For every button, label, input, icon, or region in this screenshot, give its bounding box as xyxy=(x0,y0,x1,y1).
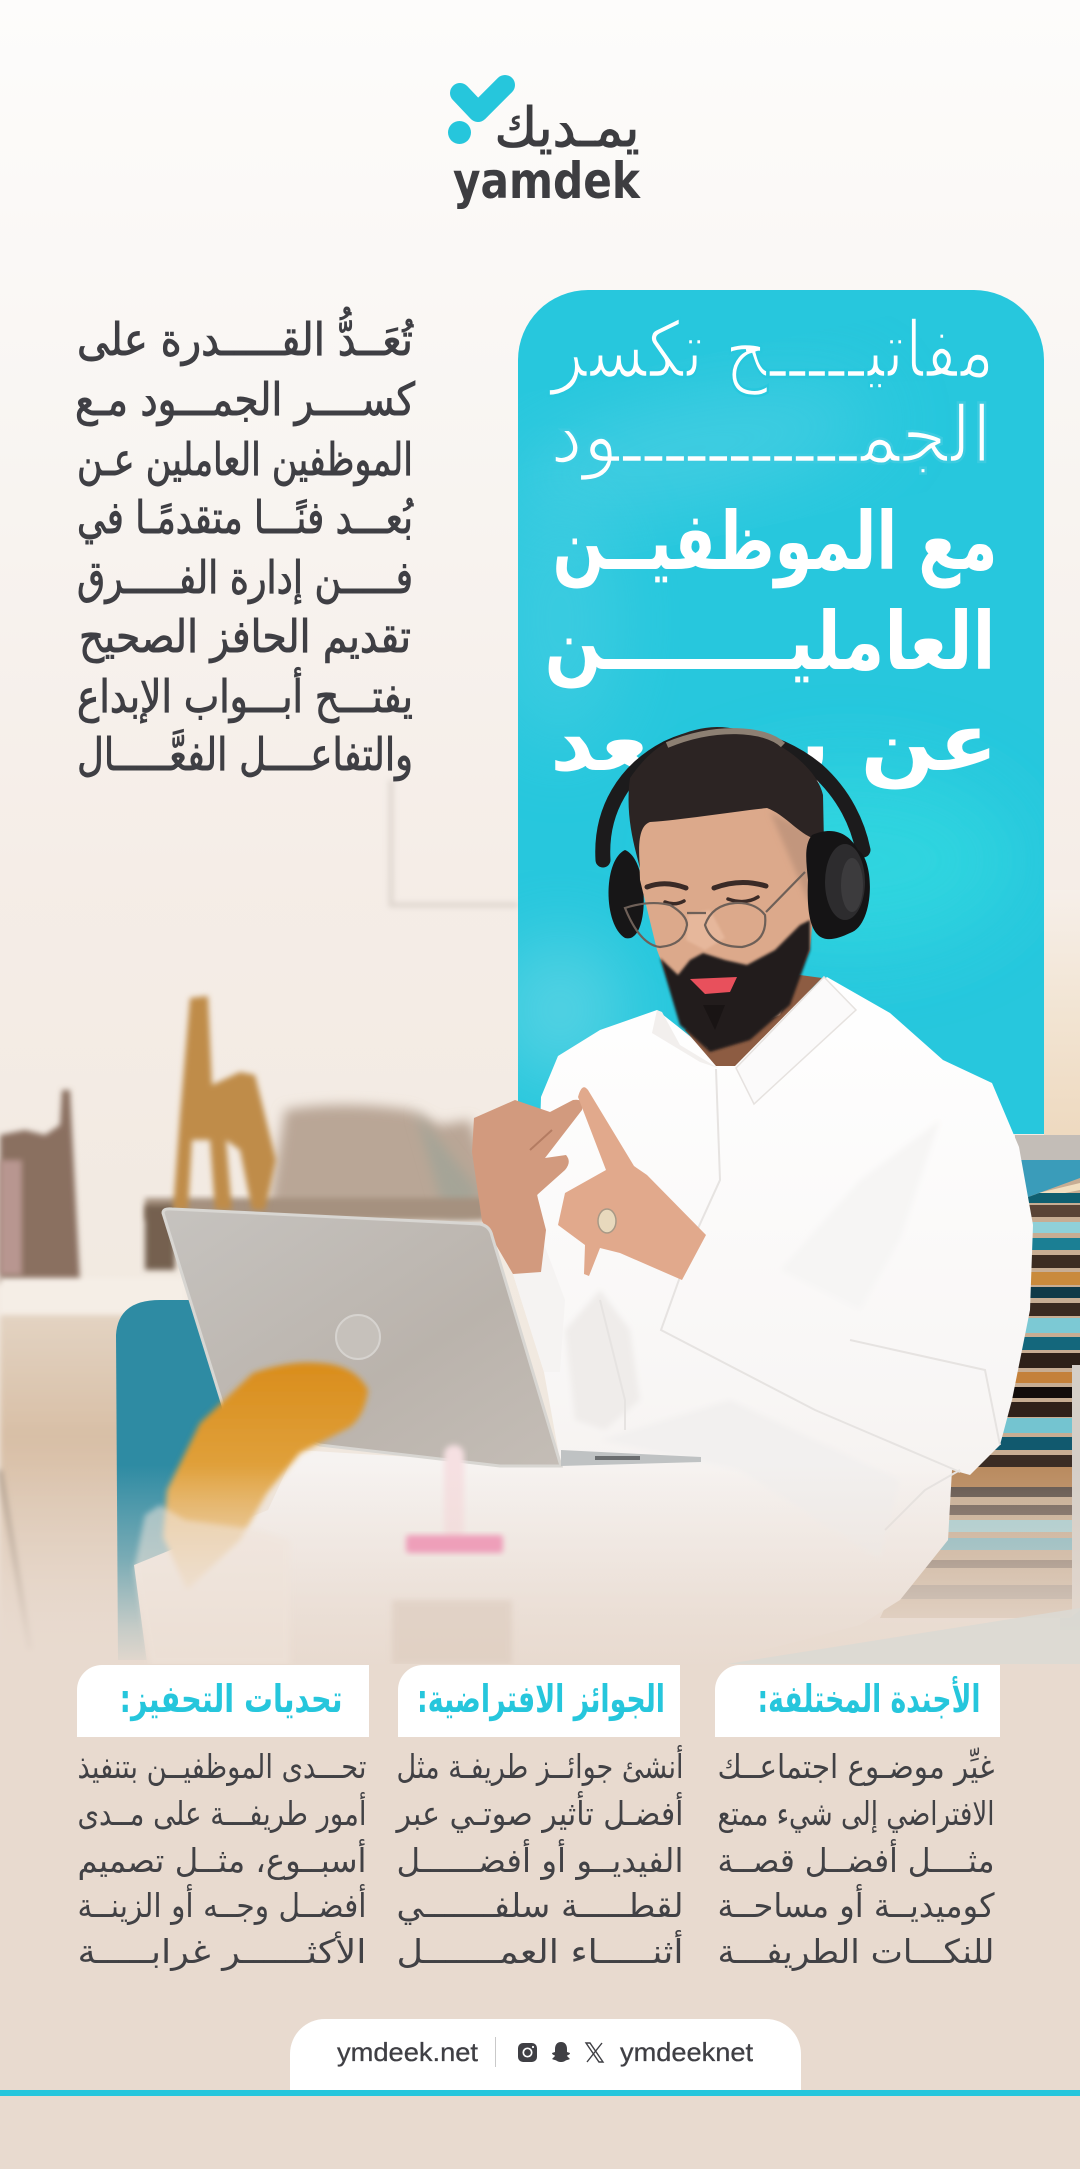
right ear cup xyxy=(806,831,870,939)
laptop xyxy=(163,1209,701,1466)
body text: الفيديــو أو أفضــــــل xyxy=(396,1839,684,1880)
soul patch xyxy=(703,1005,725,1030)
body text: غيِّر موضـوع اجتماعــك xyxy=(718,1747,994,1786)
intro paragraph: فـــــن إدارة الفـــــرق xyxy=(77,551,413,604)
intro paragraph: بُعـــد فنًـــا متقدمًـا في xyxy=(77,491,414,544)
icon: snapchat xyxy=(552,2042,570,2062)
hair xyxy=(629,727,824,868)
title: الجمـــــــــــود xyxy=(550,391,992,482)
heading card: الجوائز الافتراضية: xyxy=(417,1677,665,1721)
face xyxy=(638,800,818,1048)
body text: الأكثــــــر غرابـــــة xyxy=(78,1931,366,1971)
icon: X xyxy=(586,2043,603,2062)
heading card: تحديات التحفيز: xyxy=(120,1677,342,1721)
intro paragraph: كســــر الجمـــود مـع xyxy=(75,373,415,426)
intro paragraph: والتفاعــــل الفعَّـــــال xyxy=(77,728,413,782)
bottom fade xyxy=(0,1465,1080,1670)
body text: أسبــوع، مثــل تصميم xyxy=(78,1839,366,1880)
footer bar: ymdeeknet xyxy=(620,2037,754,2067)
panel: virtual awards column xyxy=(395,1665,684,1971)
body text: مثــــل أفضــل قصــة xyxy=(718,1839,994,1880)
heading card: الأجندة المختلفة: xyxy=(758,1675,980,1721)
panel: teal title card xyxy=(495,290,1044,1134)
panel: agenda column xyxy=(715,1665,1000,1971)
body text xyxy=(395,1745,684,1971)
glasses xyxy=(625,872,805,947)
body text xyxy=(78,1747,366,1971)
heading card xyxy=(715,1665,1000,1737)
title: عن بـــــعد xyxy=(550,696,998,790)
bottom band xyxy=(0,1664,1080,2169)
hand left xyxy=(472,1100,583,1274)
footer bar: ymdeek.net xyxy=(337,2037,479,2067)
heading card xyxy=(398,1665,680,1737)
title xyxy=(544,306,998,790)
intro paragraph xyxy=(75,306,415,782)
icon: instagram xyxy=(518,2043,537,2062)
body text: أفضـل تأثير صوتـي عبر xyxy=(395,1791,684,1833)
body text: أمور طريفـــة على مــدى xyxy=(78,1792,366,1833)
striped cushion xyxy=(880,1178,1080,1620)
hand right xyxy=(558,1087,706,1280)
ring xyxy=(598,1209,616,1233)
blurred room background xyxy=(0,780,1080,1660)
body text xyxy=(718,1747,995,1971)
blurred foreground: feather and straw xyxy=(163,1362,464,1590)
title: مفاتيـــــح تكسر xyxy=(548,306,994,397)
body text: لقطـــــة سلفـــــــي xyxy=(396,1886,684,1925)
left ear cup xyxy=(608,850,644,938)
logo xyxy=(448,85,641,210)
neck xyxy=(685,975,822,1066)
body text: كوميديــة أو مساحــة xyxy=(718,1884,995,1925)
nose xyxy=(686,910,725,950)
headband back xyxy=(603,736,863,860)
headband highlight xyxy=(667,731,783,745)
body text: تحـــدى الموظفيــن بتنفيذ xyxy=(78,1747,366,1786)
intro paragraph: يفتـــح أبـــواب الإبداع xyxy=(77,667,413,723)
collar xyxy=(652,1010,718,1068)
shirt shading xyxy=(565,1120,940,1560)
intro paragraph: تقديم الحافز الصحيح xyxy=(79,610,411,663)
intro paragraph: تُعَــدُّ القـــــدرة على xyxy=(77,306,414,366)
intro paragraph: الموظفين العاملين عـن xyxy=(77,433,413,486)
body text: الافتراضي إلى شيء ممتع xyxy=(718,1794,994,1834)
logo: يمـديك xyxy=(494,96,640,159)
eyebrows and eyes xyxy=(647,882,766,904)
body text: أنشئ جوائــز طريفـة مثل xyxy=(396,1745,684,1786)
footer bar xyxy=(0,2019,1080,2096)
thobe xyxy=(134,977,1033,1670)
beard xyxy=(660,920,810,1052)
body text: للنكـــات الطريفـــة xyxy=(718,1932,994,1971)
pale feather holder and jar xyxy=(134,1505,1080,1670)
body text: أفضــل وجــه أو الزينــة xyxy=(78,1884,366,1925)
logo: yamdek xyxy=(453,152,641,210)
body text: أثنـــــاء العمـــــــل xyxy=(396,1930,684,1971)
HP logo xyxy=(336,1315,380,1359)
person with headphones and laptop xyxy=(134,727,1033,1670)
title: العامليــــــــن xyxy=(544,595,996,689)
panel: motivation challenges column xyxy=(77,1665,369,1971)
lips xyxy=(690,977,737,994)
sleeve folds xyxy=(600,1069,1000,1530)
heading card xyxy=(77,1665,369,1737)
